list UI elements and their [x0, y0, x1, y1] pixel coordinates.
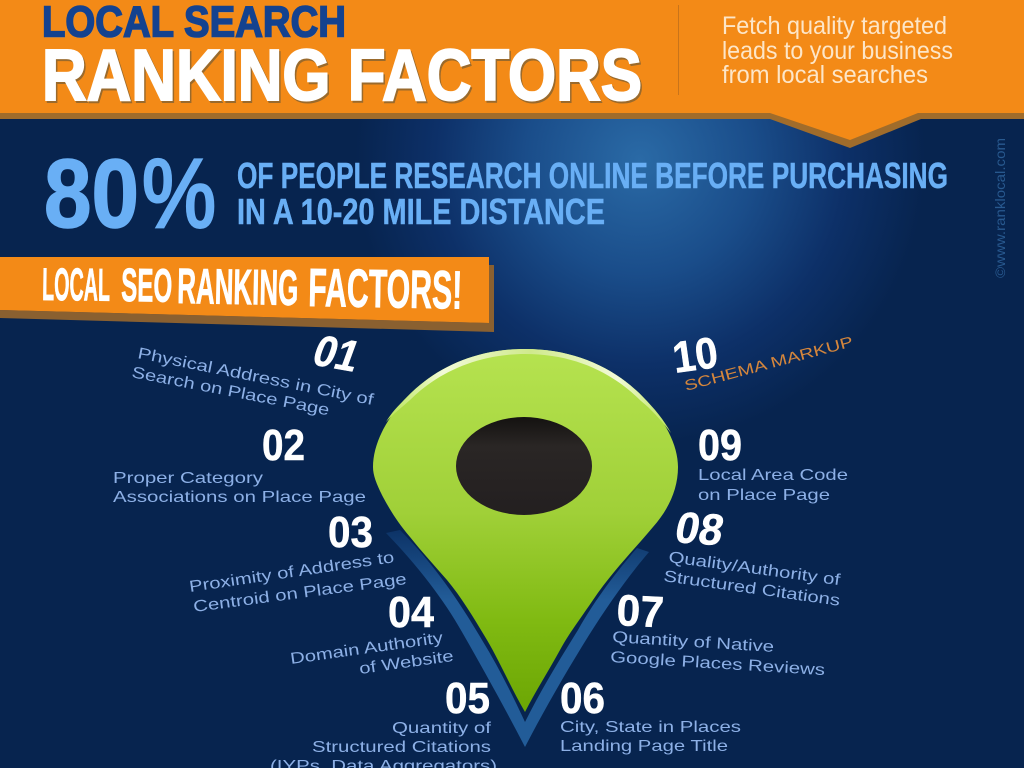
factor 01: Search on Place Page	[130, 364, 331, 419]
factor 03: Centroid on Place Page	[192, 571, 408, 616]
section banner: local seo ranking factors: FACTORS!	[308, 258, 463, 321]
factor 09: on Place Page	[698, 487, 830, 504]
factor 05	[270, 674, 497, 768]
section banner: local seo ranking factors: LOCAL	[42, 258, 110, 311]
factor 01: Physical Address in City of	[136, 345, 376, 409]
factor 06	[560, 674, 741, 755]
statistic: 80 percent: IN A 10-20 MILE DISTANCE	[237, 191, 605, 232]
factor 01: 01	[307, 327, 367, 381]
tagline	[722, 12, 953, 89]
factor 08: Structured Citations	[662, 568, 841, 610]
statistic: 80 percent	[44, 139, 948, 248]
factor 08	[662, 504, 842, 610]
factor 04: Domain Authority	[289, 630, 444, 668]
section banner: local seo ranking factors	[0, 257, 494, 332]
factor 06: 06	[560, 674, 605, 723]
factor 09	[698, 421, 848, 504]
section banner: local seo ranking factors: RANKING	[177, 258, 299, 316]
factor 05: Structured Citations	[312, 739, 491, 756]
factor 04: 04	[388, 588, 434, 637]
factor 09: 09	[698, 421, 742, 470]
factor 07: 07	[615, 586, 665, 637]
factor 10	[670, 328, 855, 395]
factor 03: Proximity of Address to	[188, 549, 396, 596]
factor 02: Associations on Place Page	[113, 489, 366, 506]
factor 05: 05	[445, 674, 490, 723]
factor 06: Landing Page Title	[560, 738, 728, 755]
factor 06: City, State in Places	[560, 719, 741, 736]
pin body	[373, 349, 678, 712]
tagline: from local searches	[722, 61, 928, 89]
pin shadow	[386, 530, 649, 747]
watermark: ©www.ranklocal.com	[992, 138, 1008, 278]
factor 07: Quantity of Native	[612, 629, 775, 656]
factor 07	[610, 586, 825, 679]
factor 02: 02	[262, 421, 305, 470]
factor 05: Quantity of	[392, 720, 492, 737]
pin hole	[456, 417, 592, 515]
factor 03	[188, 508, 408, 616]
factor 03: 03	[328, 508, 373, 557]
factor 02: Proper Category	[113, 470, 263, 487]
factor 01	[130, 327, 376, 419]
factor 02	[113, 421, 366, 506]
header banner	[0, 0, 1024, 148]
factor 10: 10	[670, 328, 721, 383]
factor 10: SCHEMA MARKUP	[683, 333, 855, 395]
pin highlight	[386, 349, 671, 433]
factor 04	[289, 588, 455, 678]
title: ranking factors: RANKING FACTORS	[42, 36, 642, 116]
map pin	[373, 349, 678, 747]
factor 08: Quality/Authority of	[667, 549, 842, 589]
tagline: Fetch quality targeted	[722, 12, 947, 40]
tagline: leads to your business	[722, 37, 953, 65]
statistic: 80 percent: %	[142, 139, 216, 248]
statistic: 80 percent: 80	[44, 139, 139, 248]
factor 04: of Website	[358, 648, 455, 678]
factor 08: 08	[671, 504, 728, 555]
factor 09: Local Area Code	[698, 467, 848, 484]
title: ranking factors: RANKING FACTORS	[44, 38, 644, 118]
section banner: local seo ranking factors: SEO	[121, 258, 173, 312]
factor 07: Google Places Reviews	[610, 649, 825, 679]
